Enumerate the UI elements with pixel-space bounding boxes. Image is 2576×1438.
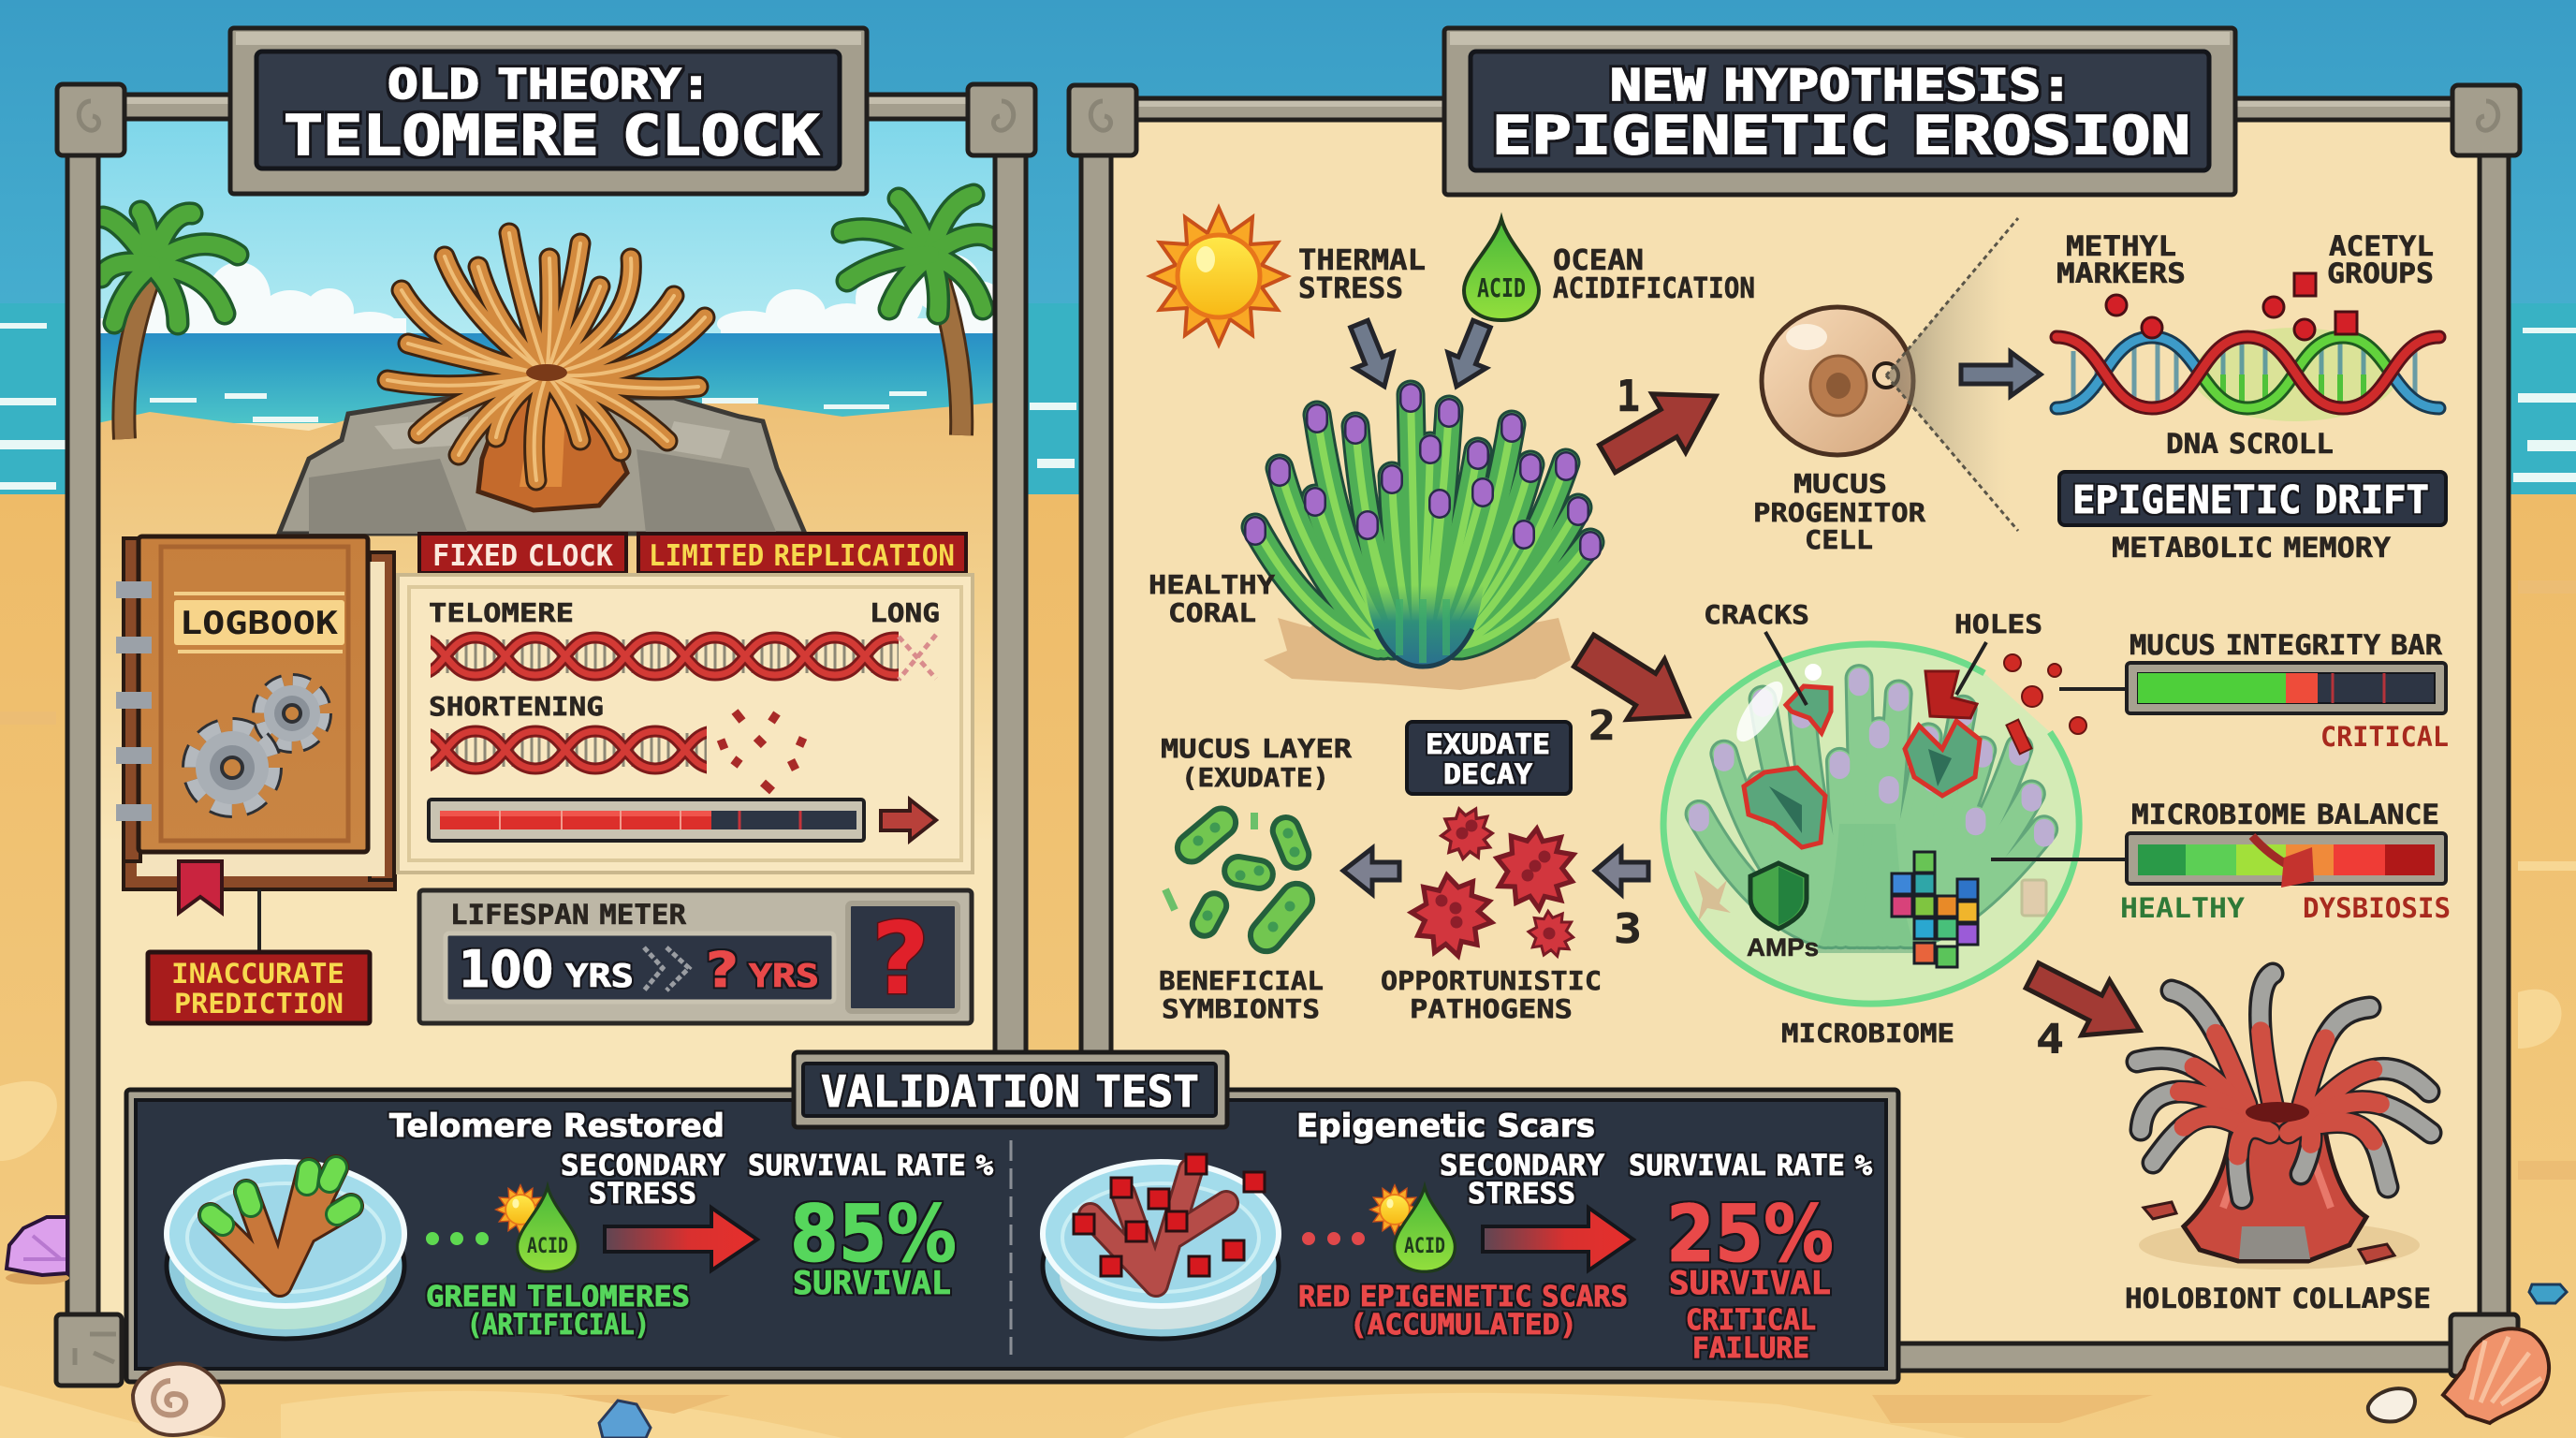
icon: right palm tree: [842, 195, 994, 435]
step number 3: 3: [1614, 905, 1642, 953]
corner post: bottom left: [56, 1314, 122, 1386]
corner post: top right: [2452, 85, 2520, 155]
arrow: cell to DNA: [1961, 352, 2041, 396]
icon: sun and acid stressor: ACID: [1404, 1235, 1445, 1258]
icon: gears: [193, 682, 323, 807]
gauge: microbiome balance: [1991, 799, 2451, 924]
icon: damaged mucus bubble with coral: [1663, 644, 2079, 1004]
logbook label: LOGBOOK: [180, 605, 339, 642]
label: microbiome: MICROBIOME: [1781, 1018, 1954, 1049]
meter readout: YRS: [565, 958, 634, 995]
callout: inaccurate prediction: PREDICTION: [174, 988, 344, 1020]
label: survival rate: SURVIVAL RATE %: [748, 1150, 993, 1182]
label: ocean acidification: OCEAN: [1553, 244, 1644, 277]
label: mucus layer exudate: MUCUS LAYER: [1161, 733, 1352, 764]
question mark box: [848, 902, 958, 1017]
label: secondary stress: [1440, 1150, 1604, 1211]
badge: exudate decay: DECAY: [1443, 758, 1533, 790]
heading line 2: TELOMERE CLOCK: [284, 103, 820, 168]
badge: epigenetic drift: EPIGENETIC DRIFT: [2072, 477, 2429, 522]
label: secondary stress: SECONDARY: [561, 1150, 725, 1182]
panel: lifespan meter: [419, 890, 972, 1023]
icon: opportunistic pathogens: [1397, 809, 1585, 970]
label: secondary stress: STRESS: [589, 1178, 696, 1211]
icon: beneficial symbionts: [1165, 802, 1319, 958]
label: red epigenetic scars: [1298, 1281, 1628, 1342]
icon: red arrow: [881, 800, 936, 841]
label: mucus progenitor cell: CELL: [1805, 524, 1873, 555]
badge: exudate decay: [1407, 722, 1571, 794]
heading: telomere restored: Telomere Restored: [389, 1108, 724, 1145]
panel: validation test: [126, 1052, 1898, 1382]
icon: mucus progenitor cell: [1762, 307, 1913, 455]
icon: microbiome blocks: [1892, 852, 1978, 967]
label: green telomeres: [426, 1281, 690, 1342]
gauge: microbiome balance: MICROBIOME BALANCE: [2131, 799, 2439, 830]
label: shortening: SHORTENING: [429, 691, 604, 722]
step number 4: 4: [2036, 1016, 2064, 1064]
meter readout: 100: [459, 940, 553, 999]
arrow: pathogens to symbionts: [1343, 848, 1399, 894]
arrow: bubble to pathogens: [1595, 848, 1648, 894]
label: mucus progenitor cell: MUCUS: [1793, 468, 1887, 499]
arrow: step 2: [1565, 621, 1707, 746]
validation title sign: [794, 1052, 1227, 1127]
icon: dots: [1309, 1232, 1358, 1245]
label: telomere: TELOMERE: [429, 597, 574, 628]
label: thermal stress: [1298, 244, 1426, 305]
label: beneficial symbionts: SYMBIONTS: [1162, 993, 1320, 1024]
tag: fixed clock: FIXED CLOCK: [432, 539, 613, 573]
label: thermal stress: THERMAL: [1298, 244, 1426, 277]
label: green telomeres: GREEN TELOMERES: [426, 1281, 690, 1313]
label: DNA scroll: DNA SCROLL: [2166, 428, 2334, 460]
leader line: logbook to prediction: [257, 889, 261, 951]
callout: inaccurate prediction: INACCURATE: [171, 958, 344, 990]
arrow: step 4: [2018, 948, 2154, 1058]
icon: spiral shell: [133, 1364, 224, 1435]
label: mucus progenitor cell: [1753, 468, 1925, 555]
question mark box: ?: [871, 902, 929, 1017]
icon: logbook: [116, 536, 395, 913]
heading line 2: EPIGENETIC EROSION: [1492, 106, 2190, 167]
label: mucus layer exudate: (EXUDATE): [1181, 762, 1329, 793]
label: critical failure: [1686, 1304, 1816, 1365]
label: healthy coral: [1149, 569, 1275, 628]
label: lifespan meter: LIFESPAN METER: [450, 899, 687, 931]
corner post: top left: [1069, 85, 1136, 155]
hole: [1925, 671, 1977, 718]
label: holes: HOLES: [1954, 609, 2042, 639]
strands: [2056, 337, 2439, 408]
gauge: mucus integrity bar: MUCUS INTEGRITY BAR: [2130, 629, 2443, 661]
cracks: [1744, 686, 1980, 847]
heading: epigenetic scars: Epigenetic Scars: [1296, 1108, 1595, 1145]
label: opportunistic pathogens: PATHOGENS: [1410, 993, 1573, 1024]
label: critical failure: FAILURE: [1692, 1332, 1809, 1365]
label: mucus layer exudate: [1161, 733, 1352, 793]
label: survival red: SURVIVAL: [1669, 1265, 1831, 1302]
faded icons: [1694, 871, 1731, 922]
label: mucus progenitor cell: PROGENITOR: [1753, 497, 1925, 528]
value: 85 percent: 85%: [790, 1188, 957, 1280]
panel: telomere: [398, 575, 973, 873]
label: secondary stress: STRESS: [1468, 1178, 1575, 1211]
step number 2: 2: [1588, 702, 1616, 750]
DNA scroll helix: [2056, 273, 2439, 421]
magnification cone: [1886, 218, 2018, 531]
label: methyl markers: [2056, 230, 2186, 289]
panel: new hypothesis parchment: [1110, 119, 2481, 1345]
icon: bookmark: [179, 861, 222, 913]
icon: blue stone: [599, 1401, 651, 1438]
label: secondary stress: [561, 1150, 725, 1211]
arrow: red gradient: [1483, 1208, 1633, 1270]
icon: petri dish with scarred coral: [1043, 1154, 1279, 1339]
label: metabolic memory: METABOLIC MEMORY: [2112, 532, 2392, 564]
label: beneficial symbionts: BENEFICIAL: [1159, 965, 1324, 996]
panel: old theory stone frame: [57, 84, 1035, 1339]
icon: sun and acid stressor: ACID: [527, 1235, 568, 1258]
title sign: old theory: [230, 28, 867, 194]
divider: [1009, 1140, 1013, 1355]
icon: petri dish with restored coral: [167, 1162, 404, 1339]
methyl and acetyl markers: [2106, 273, 2357, 340]
meter readout: ?: [706, 943, 739, 999]
icon: AMPs shield: [1750, 863, 1807, 929]
label: ocean acidification: [1553, 244, 1755, 305]
progress bar: [429, 800, 864, 841]
icon: dots: [432, 1232, 482, 1245]
label: acetyl groups: [2327, 230, 2434, 289]
icon: collapsed holobiont: [2137, 974, 2431, 1269]
panel: old theory backdrop: [97, 118, 1008, 1335]
label: cracks: CRACKS: [1704, 599, 1809, 630]
icon: healthy anemone: [388, 233, 705, 510]
long telomere helix: [431, 630, 936, 682]
book rings: [116, 590, 152, 813]
arrow: step 1: [1590, 367, 1733, 488]
label: long: LONG: [870, 597, 940, 628]
label: methyl markers: MARKERS: [2056, 257, 2186, 289]
icon: healthy coral: [1255, 394, 1590, 690]
label: red epigenetic scars: (ACCUMULATED): [1350, 1309, 1577, 1342]
label: holobiont collapse: HOLOBIONT COLLAPSE: [2125, 1283, 2431, 1314]
label: dysbiosis: DYSBIOSIS: [2303, 892, 2451, 924]
title sign: new hypothesis: [1444, 28, 2235, 195]
label: healthy coral: CORAL: [1168, 597, 1256, 628]
callout: inaccurate prediction: [148, 952, 370, 1023]
label: secondary stress: SECONDARY: [1440, 1150, 1604, 1182]
corner post: top left: [57, 84, 124, 155]
icon: purple shell: [6, 1217, 69, 1284]
label: healthy: HEALTHY: [2120, 892, 2246, 924]
icon: acid drop: [1464, 219, 1539, 320]
label: survival green: SURVIVAL: [793, 1265, 951, 1302]
icon: white shell: [2368, 1388, 2415, 1421]
rungs: [2073, 339, 2415, 406]
label: healthy coral: HEALTHY: [1149, 569, 1275, 600]
label: critical: CRITICAL: [2320, 721, 2449, 753]
heading line 1: OLD THEORY:: [388, 61, 711, 109]
label: AMPs: AMPs: [1747, 933, 1819, 961]
label: thermal stress: STRESS: [1298, 272, 1403, 305]
icon: left palm tree: [101, 212, 238, 439]
label: green telomeres: (ARTIFICIAL): [467, 1309, 650, 1342]
meter readout: YRS: [749, 958, 819, 995]
meter readout: [446, 933, 834, 1002]
icon: rock: [279, 398, 805, 534]
logbook label: [174, 594, 344, 652]
label: acetyl groups: ACETYL: [2329, 230, 2434, 262]
arrow: stress left: [1340, 316, 1403, 394]
icon: acid drop: ACID: [1477, 272, 1526, 303]
panel: new hypothesis stone frame: [1069, 85, 2520, 1376]
label: ocean acidification: ACIDIFICATION: [1553, 272, 1755, 305]
label: beneficial symbionts: [1159, 965, 1324, 1024]
debris fragments: [2004, 654, 2086, 754]
label: opportunistic pathogens: [1381, 965, 1602, 1024]
arrow: red gradient: [605, 1208, 757, 1270]
arrow: stress right: [1438, 316, 1500, 394]
icon: sun and acid stressor: [1370, 1185, 1455, 1271]
icon: scallop shell: [2443, 1328, 2549, 1423]
icon: blue gem: [2529, 1284, 2567, 1303]
gauge: mucus integrity bar: [2059, 629, 2449, 753]
corner post: top right: [968, 84, 1035, 155]
step number 1: 1: [1617, 371, 1640, 421]
heading line 1: NEW HYPOTHESIS:: [1610, 60, 2072, 110]
label: red epigenetic scars: RED EPIGENETIC SCARS: [1298, 1281, 1628, 1313]
label: opportunistic pathogens: OPPORTUNISTIC: [1381, 965, 1602, 996]
label: acetyl groups: GROUPS: [2327, 257, 2434, 289]
tag: limited replication: LIMITED REPLICATION: [649, 539, 955, 573]
label: methyl markers: METHYL: [2066, 230, 2176, 262]
label: critical failure: CRITICAL: [1686, 1304, 1816, 1337]
icon: sun and acid stressor: [496, 1185, 578, 1271]
validation title sign: VALIDATION TEST: [821, 1066, 1199, 1117]
badge: exudate decay: EXUDATE: [1426, 728, 1550, 760]
value: 25 percent: 25%: [1666, 1188, 1834, 1280]
short telomere helix with fragments: [431, 712, 803, 791]
label: survival rate: SURVIVAL RATE %: [1629, 1150, 1872, 1182]
corner post: bottom right: [2451, 1314, 2518, 1376]
leader lines: cracks and holes: [1765, 632, 1986, 705]
clouds: [97, 253, 1008, 344]
icon: sun thermal stress: [1150, 208, 1287, 345]
